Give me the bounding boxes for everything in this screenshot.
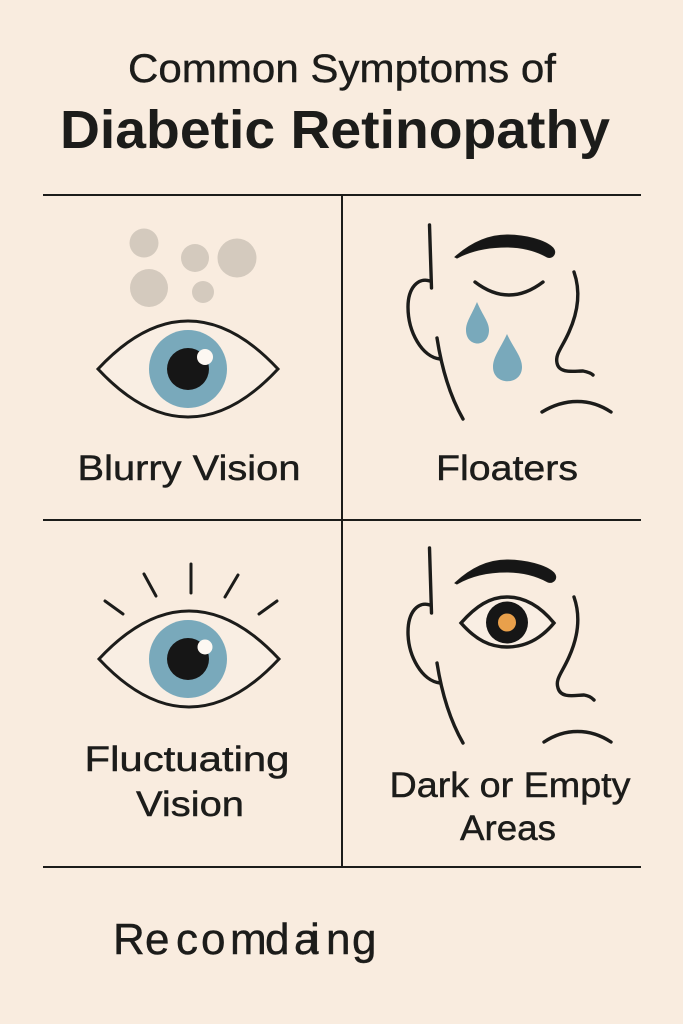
label: floaters: Floaters — [436, 449, 578, 488]
label: fluctuating vision: Fluctuating — [84, 740, 290, 779]
icon: eye with rays — [99, 564, 279, 707]
title: Common Symptoms of — [128, 47, 557, 91]
icon: eye — [98, 321, 278, 417]
label: fluctuating vision: Vision — [136, 785, 244, 824]
icon: face with tears — [408, 225, 611, 419]
panel: floaters — [408, 225, 611, 488]
label: blurry vision: Blurry Vision — [78, 449, 300, 488]
title: Diabetic Retinopathy — [60, 100, 610, 160]
panel: dark or empty areas — [390, 548, 631, 848]
panel: blurry vision — [78, 228, 300, 488]
label: dark or empty areas: Areas — [460, 809, 556, 848]
panel: fluctuating vision — [84, 564, 290, 824]
label: dark or empty areas: Dark or Empty — [390, 766, 631, 805]
footer text: Recomdaing — [113, 915, 376, 964]
title — [60, 47, 610, 160]
icon: face with dark spot eye — [408, 548, 611, 743]
icon: floaters spots — [130, 228, 256, 307]
